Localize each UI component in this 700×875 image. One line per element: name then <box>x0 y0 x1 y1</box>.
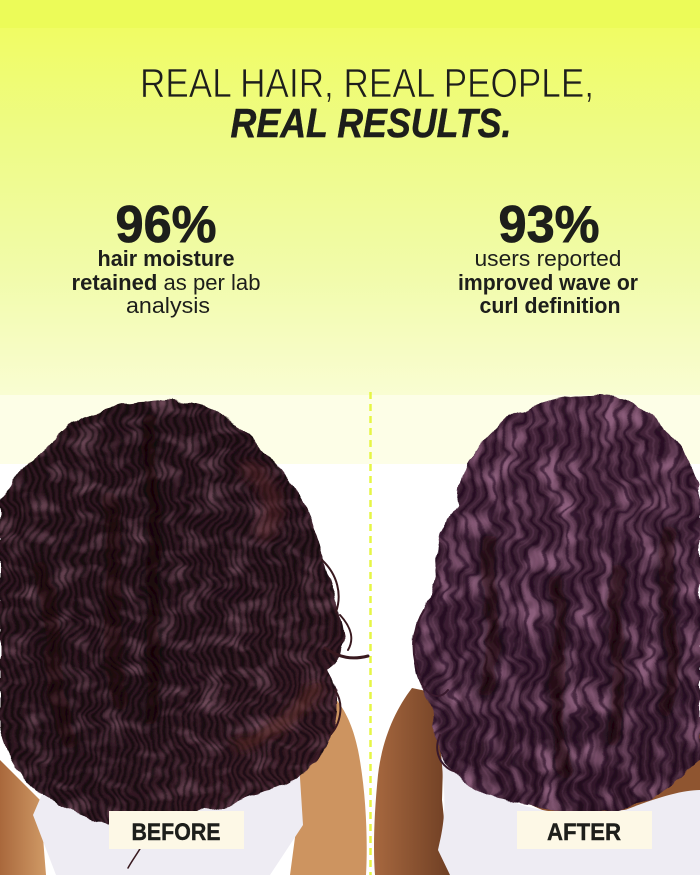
stat: 93% wave or curl definition: improved wave or <box>458 270 638 295</box>
after: flyaway curls <box>414 610 458 772</box>
photo: after <box>374 360 700 875</box>
after: label: AFTER <box>547 819 621 846</box>
photo: before <box>0 398 370 875</box>
stat: 93% wave or curl definition: 93% <box>498 196 600 254</box>
title: REAL RESULTS. <box>230 100 512 146</box>
stat: 96% hair moisture: analysis <box>126 293 210 318</box>
after: shoulder and arm <box>374 688 450 875</box>
after: white tank top <box>437 700 700 875</box>
stat: 96% hair moisture <box>72 196 260 318</box>
stat: 96% hair moisture: hair moisture <box>98 246 234 271</box>
stat: 96% hair moisture: 96% <box>116 196 216 254</box>
stat: 96% hair moisture: retained as per lab <box>72 270 260 295</box>
before: shoulders <box>0 680 367 875</box>
stat: 93% wave or curl definition: curl definition <box>480 293 620 318</box>
title <box>140 60 594 146</box>
divider: dashed line <box>369 392 372 875</box>
before: white tank top <box>33 715 303 875</box>
stat: 93% wave or curl definition: users reported <box>474 246 622 271</box>
before: hair <box>0 398 346 825</box>
after: neck skin <box>520 720 700 818</box>
stat: 93% wave or curl definition <box>458 196 638 318</box>
after: label <box>517 811 652 849</box>
after: hair <box>412 394 700 811</box>
before: flyaway curls <box>128 560 368 868</box>
title: REAL HAIR, REAL PEOPLE, <box>140 60 594 106</box>
before: label: BEFORE <box>132 819 220 846</box>
before: label <box>109 811 244 849</box>
